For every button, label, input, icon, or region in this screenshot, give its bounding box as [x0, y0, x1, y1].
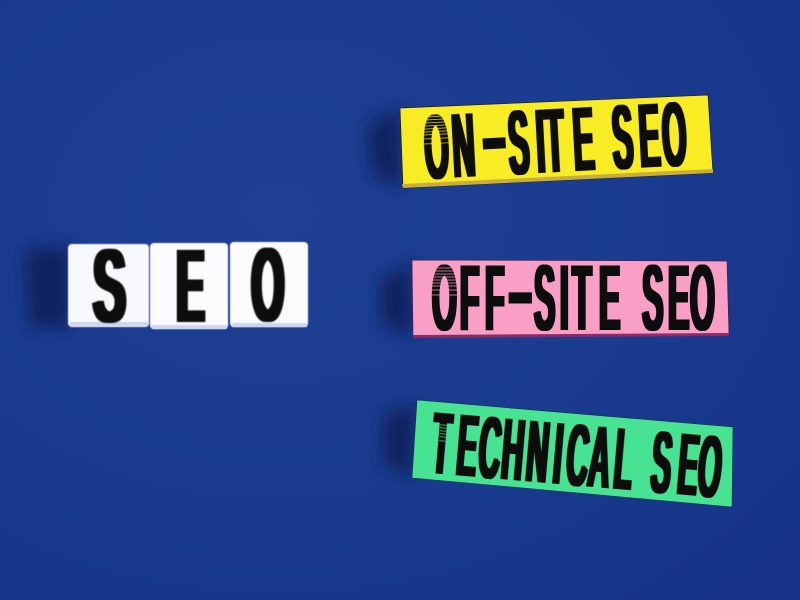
tag label: [432, 238, 715, 350]
tag: technical SEO (green): [382, 394, 733, 516]
cube: S: [68, 229, 149, 345]
first letter glare stripes: [439, 425, 452, 442]
cube: E: E: [176, 227, 205, 344]
tag lower edge: [413, 333, 729, 338]
tag lower edge: [402, 169, 713, 188]
cube: O: [230, 226, 308, 343]
tag shadow: [368, 108, 403, 188]
tag body: [400, 95, 713, 188]
tag body: [412, 260, 729, 337]
tag label: OFF: [432, 244, 505, 350]
tag: off-site SEO (pink): [380, 238, 729, 350]
tag label: ON: [422, 93, 477, 199]
cube: E: [150, 227, 228, 344]
tag shadow: [380, 262, 413, 337]
tag label: [421, 76, 689, 199]
cube shadow: [25, 245, 70, 328]
tag shadow: [382, 402, 417, 478]
tag: on-site SEO (yellow): [368, 76, 713, 199]
tag label: SITE SEO: [534, 244, 715, 350]
first letter glare stripes: [432, 268, 457, 295]
first letter glare stripes: [423, 116, 450, 144]
tag body: [412, 400, 733, 507]
SEO cubes group: [25, 226, 308, 345]
tag label: SITE SEO: [506, 82, 689, 195]
cube: S: S: [93, 229, 126, 345]
tag label: -: [507, 238, 534, 342]
tag label: TECHNICAL SEO: [428, 394, 726, 516]
cube: O: O: [252, 226, 284, 343]
tag label: -: [478, 85, 510, 188]
